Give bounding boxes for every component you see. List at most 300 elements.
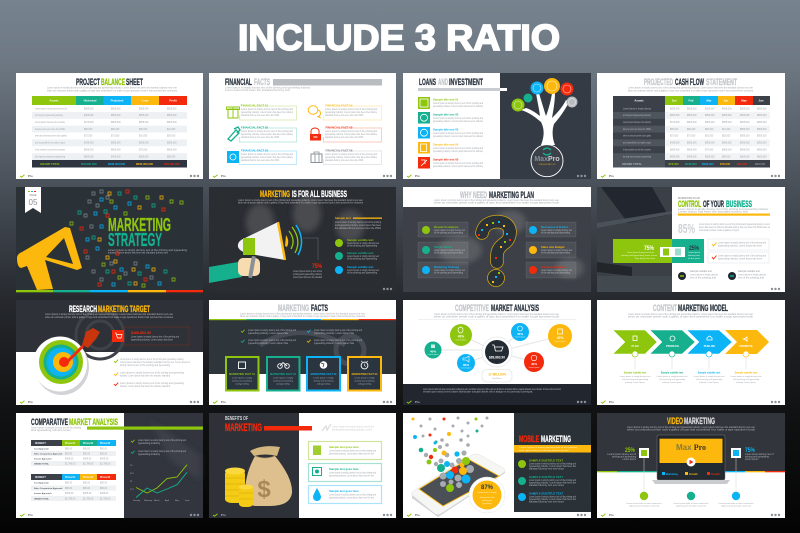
text box 2: typesetting industry. Lorem Ipsum has been the text <box>329 474 374 478</box>
balance table: $72,000,000 <box>164 162 180 166</box>
cash flow table: the leap into electronic typesetting <box>623 155 652 158</box>
comparison table 1: $85.00 <box>83 448 91 450</box>
check items: typesetting industry. Lorem Ipsum has <box>314 342 355 345</box>
heading: marketing strategy <box>108 215 171 250</box>
fact card 01: Lorem Ipsum is simply <box>232 378 252 380</box>
line chart: March <box>154 500 160 502</box>
footer text: veniam quis nostrud exerci tation ullamcorper suscipit lobortis nisl ut aliquip ex ea commodo consequat. <box>423 390 533 394</box>
balance table: Lorem Ipsum is simply dummy text of the <box>35 108 68 110</box>
balance table: $855,000 <box>111 122 121 124</box>
item 01 <box>418 97 484 109</box>
text box 2: Lorem Ipsum is simply dummy text of the printing and <box>329 472 377 474</box>
comparison table 2: $455.00 <box>65 493 74 495</box>
footer nav icons <box>383 175 392 177</box>
comparison table 1: GRAND TOTAL <box>34 462 50 466</box>
green and teal split panel: printing and typesetting lorem Ipsum <box>621 254 657 257</box>
info box left 2: Target Market <box>434 245 452 249</box>
cash flow table: $855,000 <box>757 122 767 124</box>
cash flow table: $855,000 <box>705 115 715 117</box>
fact 03: FINANCIAL FACT 03 <box>241 148 268 152</box>
center node <box>482 337 512 367</box>
subtitle item 2: Lorem Ipsum is simply dummy text <box>347 255 379 258</box>
cash flow table: dummy text ever since the 1500s <box>623 128 652 131</box>
heading: project balance sheet <box>76 77 143 88</box>
cash flow table: Apr <box>724 98 729 102</box>
subtitle item 1: Sample subtitle text <box>690 270 712 273</box>
cash flow table: $855,000 <box>687 115 697 117</box>
network connectors <box>433 332 560 363</box>
title band <box>403 187 591 207</box>
intro text: when an unknown printer took a galley of type and scrambled it to make a type specimen book <box>434 316 560 318</box>
balance table: $439,000 <box>84 143 94 145</box>
list item 1: standard dummy text ever since <box>529 468 565 470</box>
comparison table 2: $95.00 <box>65 488 73 490</box>
item 04: typesetting industry. Lorem Ipsum has been the industry <box>433 150 484 153</box>
heading: comparative market analysis: COMPARATIVE <box>31 417 68 428</box>
yellow band: and typesetting industry lorem Ipsum <box>519 449 569 452</box>
stat: 75%: printing and typesetting industry <box>293 273 323 276</box>
subtitle item 2: Lorem Ipsum is simply dummy <box>738 274 767 276</box>
comparison table 2: $1,786.00 <box>65 498 76 500</box>
subtitle item 1: Lorem Ipsum is simply dummy text <box>347 242 379 245</box>
pill: 17 million <box>482 370 512 382</box>
laptop <box>652 435 730 484</box>
fact card 04: MARKETING FACT 04 <box>352 373 378 376</box>
step: produce <box>657 351 688 384</box>
connector <box>303 238 318 260</box>
cash flow table: $855,000 <box>757 108 767 110</box>
info box right 2: Sales and Budget <box>541 245 565 249</box>
phone illustration <box>412 454 505 517</box>
cash flow table: $86,000 <box>705 129 714 131</box>
fact 04: typesetting industry. Lorem Ipsum has been the industry <box>325 111 378 114</box>
intro text: Lorem Ipsum is simply dummy text of the printing and typesetting industry. Lorem Ipsum has been the standard dummy text ever <box>434 313 559 316</box>
main title: INCLUDE 3 RATIO <box>238 17 560 58</box>
fact card 01: and typesetting <box>235 382 249 386</box>
fact 02: typesetting industry. Lorem Ipsum has been the industry <box>241 133 294 136</box>
step: promote: industry. Lorem Ipsum <box>736 381 756 384</box>
node: green 40% <box>450 324 472 346</box>
cash flow table: $72,000 <box>687 136 696 138</box>
stat: 75%: Lorem Ipsum dummy text of the <box>293 270 323 273</box>
green title bar <box>87 426 203 430</box>
item 01: typesetting industry. Lorem Ipsum has been the industry <box>433 105 484 108</box>
green and teal split panel: Lorem Ipsum dummy text of the <box>627 251 655 254</box>
text box 3: Lorem Ipsum is simply dummy text of the printing and <box>329 494 377 496</box>
balance table: $855,000 <box>167 149 177 151</box>
stat: 25%: 25% <box>625 447 635 454</box>
slide: marketing is for all business <box>209 187 396 292</box>
red title bar <box>264 426 312 430</box>
green and teal split panel: dummy text <box>688 254 700 257</box>
footer text <box>423 388 561 394</box>
intro text: when an unknown printer took a galley of type and scrambled it to make a type specimen book it has survived five centuries <box>45 316 174 319</box>
center node: $89,863.90 <box>489 356 505 360</box>
heading: projected cash flow statement <box>644 77 737 88</box>
balance table: $91,000 <box>139 136 148 138</box>
comparison table 2: $455.00 <box>100 493 109 495</box>
balance table: $86,000 <box>139 129 148 131</box>
heading: mobile marketing: MARKETING <box>541 434 571 445</box>
list item 3: Lorem Ipsum is simply dummy text of the printing and <box>529 496 577 498</box>
heading: marketing facts: FACTS <box>311 303 328 314</box>
cash flow table: $855,000 <box>757 136 767 138</box>
slide: control of your business <box>597 187 785 292</box>
intro text: Lorem Ipsum is simply dummy text of the printing and typesetting industry. Lorem Ipsum has been the standard dummy text ever <box>45 313 173 316</box>
step: produce: of the printing and typesetting <box>659 378 685 381</box>
balance table: $855,000 <box>84 149 94 151</box>
check items: Lorem Ipsum is simply dummy text of the printing and <box>248 329 297 332</box>
cash flow table: $855,000 <box>757 149 767 151</box>
laptop: Marketing <box>666 473 678 476</box>
step: publish: Sample subtitle text <box>698 372 720 374</box>
text box 2 <box>308 464 382 482</box>
slide: content marketing model <box>597 300 785 405</box>
title bar <box>273 79 382 86</box>
balance table <box>32 96 187 168</box>
balance table: $12,000 <box>167 129 176 131</box>
cash flow table: $78,000 <box>720 162 731 166</box>
cash flow table: $855,000 <box>740 136 750 138</box>
cash flow table: $78,000 <box>668 162 679 166</box>
check items: Lorem Ipsum is simply dummy text of the printing and <box>138 439 187 442</box>
cash flow table: Jun <box>759 98 764 102</box>
balance table: Projected <box>111 98 124 102</box>
footer logo: Pro <box>415 513 420 517</box>
balance table: GRAND TOTAL <box>40 162 60 166</box>
fact 05: FINANCIAL FACT 05 <box>326 126 353 130</box>
node: teal 40%: 40% <box>430 350 436 354</box>
balance table: $855,000 <box>84 108 94 110</box>
item 04: Sample title text 04 <box>433 142 459 146</box>
footer nav icons <box>383 514 392 516</box>
info box left 1: Lorem Ipsum is simply dummy text <box>434 229 465 232</box>
stat: 85%: Ipsum has been the industry standard dummy text ever since the 1500s when an <box>699 226 771 229</box>
point 2 <box>673 492 709 508</box>
info box right 2 <box>526 242 576 258</box>
check item 1 <box>114 358 191 367</box>
intro text <box>31 426 82 432</box>
slide: projected cash flow statement <box>597 73 785 179</box>
line chart: January <box>133 500 140 502</box>
balance table: $72,000 <box>111 136 120 138</box>
cash flow table: Mar <box>707 98 712 102</box>
subtitle item 2 <box>335 251 379 260</box>
heading: projected cash flow statement: CASH FLOW <box>675 77 704 88</box>
fact card 04: and typesetting <box>358 382 371 386</box>
heading: research marketing target: MARKETING TARGET <box>98 304 150 315</box>
chevron process: PLAN <box>631 344 639 348</box>
sample text block <box>335 216 382 230</box>
balance table: $465,000 <box>84 115 94 117</box>
cash flow table: Feb <box>689 98 694 102</box>
rule <box>418 318 576 321</box>
green and teal split panel: Lorem Ipsum <box>688 251 700 254</box>
heading: control of your business <box>678 197 752 210</box>
fact card 03: dummy text of printing <box>314 380 333 382</box>
heading: project balance sheet: SHEET <box>126 77 143 88</box>
cash flow table: $439,000 <box>670 143 680 145</box>
stat: 85% <box>678 221 771 236</box>
heading: competitive market analysis: MARKET ANALYSIS <box>491 303 539 314</box>
point 3 <box>718 492 754 508</box>
info box right 3: Tracking & Review <box>541 265 567 269</box>
balance table: $806,000,000 <box>136 162 154 166</box>
comparison table 1: $95.00 <box>83 454 91 456</box>
balance table: $855,000 <box>167 143 177 145</box>
cash flow table: May <box>741 98 747 102</box>
check item 2: Lorem Ipsum is simply dummy text of the printing and typesetting <box>120 372 185 374</box>
fact 01 <box>226 104 296 120</box>
balance table: $855,000 <box>139 122 149 124</box>
sales callout: Lorem Ipsum is simply dummy text of the printing and <box>131 336 180 338</box>
fact 01: Lorem Ipsum is simply dummy text of the printing and <box>241 108 294 111</box>
comparison table 1: $1,786.00 <box>65 464 76 466</box>
heading: marketing is for all business: MARKETING <box>260 189 290 200</box>
list item 2 <box>518 475 577 487</box>
balance table: dummy text ever since the 1500s <box>35 128 66 131</box>
heading: financial facts: FACTS <box>254 77 270 88</box>
icon spray <box>70 190 183 287</box>
step: promote <box>731 351 762 384</box>
check item 3: industry. Lorem Ipsum has been the industry standard <box>120 385 171 388</box>
fact 04: FINANCIAL FACT 04 <box>326 104 353 108</box>
intro text <box>240 312 366 318</box>
node: blue 40%: 40% <box>517 332 523 336</box>
intro text: Lorem Ipsum has been the standard dummy text <box>678 210 748 214</box>
comparison table 1: Cost Approach <box>34 448 50 450</box>
question mark icon <box>478 221 511 286</box>
footer nav icons <box>771 288 780 290</box>
check items: Lorem Ipsum is simply dummy text of the printing and <box>138 450 187 453</box>
check box 1: Lorem Ipsum is simply dummy text of the printing and <box>718 242 767 244</box>
node: teal 40%: Lorem Ipsum <box>428 354 439 356</box>
yellow rule <box>678 214 770 216</box>
footer nav icons <box>577 175 586 177</box>
cash flow table: $855,000 <box>757 156 767 158</box>
footer nav icons <box>383 288 392 290</box>
slide: mobile marketing <box>403 413 591 518</box>
footer logo <box>407 513 420 517</box>
balance table: the leap into electronic typesetting <box>35 155 66 158</box>
text box 2: Sample text goes here <box>329 467 359 471</box>
node: yellow 40%: 40% <box>557 336 563 340</box>
footer nav icons <box>577 401 586 403</box>
intro text <box>628 313 754 318</box>
fact card 01 <box>226 357 258 390</box>
heading: competitive market analysis: COMPETITIVE <box>455 303 489 314</box>
cash flow table: It has survived not only five centuries <box>623 148 652 151</box>
icon tile: right <box>731 448 741 458</box>
fact 04: Lorem Ipsum is simply dummy text of the printing and <box>325 108 378 111</box>
stat: 85%: Lorem Ipsum is simply dummy text of the printing and typesetting industry. Lorem <box>699 223 770 226</box>
cash flow table: $855,000 <box>670 115 680 117</box>
step: publish: of the printing and typesetting <box>696 378 722 381</box>
footer nav icons <box>190 514 199 516</box>
info box left 3: Lorem Ipsum is simply dummy text <box>434 269 465 272</box>
stat: 85%: unknown printer took a galley of type <box>699 229 740 232</box>
subtitle item 2: Sample subtitle text <box>347 251 373 255</box>
comparison table 2: $1,786.00 <box>83 498 94 500</box>
heading: control of your business: BUSINESS <box>726 199 752 210</box>
sample text block: the standard dummy text ever since the 1500s <box>335 227 382 230</box>
cash flow table: and scrambled it to make a type <box>623 142 652 145</box>
comparison table 1: $1,786.00 <box>100 464 111 466</box>
info box right 2: Lorem Ipsum is simply dummy text <box>541 249 572 252</box>
cash flow table: $455,000 <box>722 108 732 110</box>
comparison table 2: Prices 02 <box>83 477 94 479</box>
cash flow table: $75,000 <box>705 149 714 151</box>
cash flow table: printing and typesetting industry <box>623 114 652 117</box>
line chart: 35 <box>130 481 133 483</box>
info box left 3 <box>418 262 468 278</box>
chevron process: PRODUCE <box>666 344 679 348</box>
stat: 25% <box>608 447 637 461</box>
subtitle item 2: of the printing and typesetting <box>347 258 378 260</box>
balance table: $72,000 <box>84 136 93 138</box>
info box right 3 <box>526 262 576 278</box>
step: plan: of the printing and typesetting <box>622 378 648 381</box>
money bag illustration: $ <box>257 476 271 503</box>
intro text <box>225 86 311 92</box>
balance table: $855,000 <box>139 108 149 110</box>
comparison table 1: $455.00 <box>83 458 92 460</box>
balance table: Profit <box>169 98 177 102</box>
page bookmark <box>25 187 41 213</box>
pill: 17 million: 17 MILLION <box>488 372 506 376</box>
faint logo and text <box>322 424 375 432</box>
fact 02 <box>228 126 296 142</box>
text box 1: typesetting industry. Lorem Ipsum has been the text <box>329 452 374 456</box>
item 05 <box>418 157 484 168</box>
cash flow table: $855,000 <box>705 122 715 124</box>
intro text: Lorem Ipsum is simply dummy text of the printing and typesetting industry. Lorem Ipsum has been the standard dummy text ever <box>628 313 753 316</box>
cash flow table: $855,000 <box>687 143 697 145</box>
intro text: Lorem Ipsum has been the standard dummy text <box>225 89 290 92</box>
step: produce: industry. Lorem Ipsum <box>662 381 682 384</box>
green and teal split panel: of the print <box>688 257 701 260</box>
fact card 03: MARKETING FACT 03 <box>311 373 337 376</box>
info box left 2: Lorem Ipsum is simply dummy text <box>434 249 465 252</box>
item 01: Lorem Ipsum is simply dummy text of the printing and <box>433 102 484 105</box>
description: Lorem Ipsum is simply dummy text of the printing and typesetting <box>108 249 188 252</box>
heading: comparative market analysis: MARKET ANALYSIS <box>69 417 118 428</box>
node: red 40%: Lorem Ipsum <box>529 367 540 369</box>
heading: marketing is for all business <box>260 189 347 200</box>
fact 01: standard dummy text ever since the 1500 <box>241 114 280 117</box>
intro text: when an unknown printer took a galley of type and scrambled it to make a type specimen book <box>434 202 560 204</box>
balance table: $86,000 <box>84 129 93 131</box>
slide: loans and investment <box>403 73 591 179</box>
cash flow table: $855,000 <box>740 122 750 124</box>
step: plan <box>620 351 651 384</box>
comparison table 1: $95.00 <box>100 454 108 456</box>
intro text <box>434 199 560 204</box>
line chart: April <box>165 499 170 502</box>
cash flow table: $55,000 <box>722 136 731 138</box>
balance table: and scrambled it to make a type <box>35 142 66 145</box>
heading: project balance sheet: BALANCE <box>101 77 125 88</box>
footer nav icons <box>771 401 780 403</box>
stat circle: 87% <box>469 477 505 513</box>
balance table: printing and typesetting industry <box>35 114 64 117</box>
info box left 2 <box>418 242 468 258</box>
cash flow table: $85,000 <box>722 156 731 158</box>
comparison table 1: Prices 01 <box>65 443 76 445</box>
cash flow table: $855,000 <box>722 149 732 151</box>
balance table: $855,000 <box>167 108 177 110</box>
footer logo: Pro <box>28 174 33 178</box>
node: red 40%: 40% <box>531 362 537 366</box>
megaphone with hand <box>209 222 302 283</box>
sample text block: and typesetting industry. Lorem Ipsum has been <box>335 224 382 227</box>
cash flow table: Jan <box>672 98 677 102</box>
list item 3: standard dummy text ever since <box>529 500 565 504</box>
stat: 75%: Lorem Ipsum has been the standard <box>293 276 323 279</box>
cash flow table: $855,000 <box>740 156 750 158</box>
balance table: $855,000 <box>111 115 121 117</box>
info box right 1: of the printing and typesetting <box>541 232 571 234</box>
heading: financial facts: FINANCIAL <box>225 77 252 88</box>
title bar <box>418 88 507 91</box>
cash flow table: $455,000 <box>687 156 697 158</box>
point 1: adipiscing elit sed diam nonummy <box>629 504 659 508</box>
cash flow table: $855,000 <box>705 108 715 110</box>
footer logo <box>407 174 420 178</box>
line chart: June <box>185 500 190 502</box>
cash flow table: $855,000 <box>740 143 750 145</box>
comparison table 2: $455.00 <box>83 493 92 495</box>
comparison table 2: $95.00 <box>83 488 91 490</box>
info box left 1: of the printing and typesetting <box>434 232 464 234</box>
item 04 <box>418 142 484 154</box>
list item 2: Lorem Ipsum is simply dummy text of the printing and <box>529 479 577 482</box>
cash flow table: $855,000 <box>670 108 680 110</box>
heading: loans and investment: INVESTMENT <box>449 77 483 88</box>
text box 1 <box>308 442 382 460</box>
cash flow table: $855,000 <box>670 156 680 158</box>
megaphone icon <box>17 227 82 290</box>
slide: research marketing target <box>16 300 203 405</box>
check item 1: Lorem Ipsum has been the industry standard dummy text. Lorem Ipsum is <box>120 361 191 364</box>
intro text <box>628 86 754 92</box>
page bookmark: 05 <box>29 198 38 207</box>
stat circle: 87%: dummy text of the <box>479 496 495 499</box>
heading: project balance sheet: PROJECT <box>76 77 100 88</box>
node: teal 40% <box>424 342 442 358</box>
node: green 40%: Lorem Ipsum <box>456 340 467 342</box>
text box 3: typesetting industry. Lorem Ipsum has been the text <box>329 496 374 500</box>
cash flow table: Lorem Ipsum has been the industry <box>623 121 652 124</box>
point 1 <box>626 492 662 508</box>
footer logo: Pro <box>609 174 614 178</box>
check box 2: typesetting industry. Lorem Ipsum has been <box>718 258 763 260</box>
footer logo: Pro <box>221 513 226 517</box>
stat: 25%: printing and typesetting <box>612 456 637 458</box>
slide: comparative market analysis <box>16 413 203 518</box>
cash flow table: $98,000 <box>755 162 766 166</box>
line chart: 70 <box>130 465 133 467</box>
comparison table 1: SUBJECT <box>35 443 46 445</box>
fact 05: Lorem Ipsum is simply dummy text of the printing and <box>325 130 378 133</box>
fact 06: standard dummy text ever since the 1500 <box>325 159 364 162</box>
comparison table 2: $95.00 <box>100 488 108 490</box>
green and teal split panel: 25% <box>689 245 699 252</box>
intro text <box>45 313 174 319</box>
footer nav icons <box>771 175 780 177</box>
line chart: May <box>175 500 179 502</box>
node: yellow 40%: Lorem Ipsum <box>555 341 566 343</box>
